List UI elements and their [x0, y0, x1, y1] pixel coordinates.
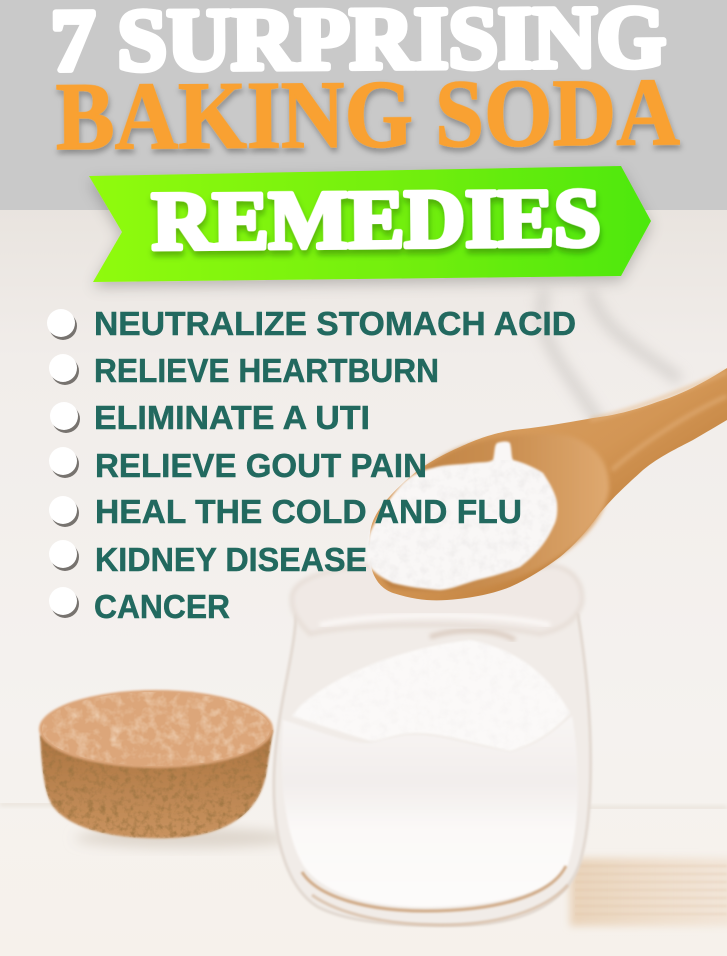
jar glass body: [274, 596, 591, 925]
cork shadow: [75, 828, 295, 848]
glass jar of baking soda: [274, 566, 591, 925]
list item 4: RELIEVE GOUT PAIN: [95, 447, 427, 484]
list item 6: KIDNEY DISEASE: [95, 541, 367, 578]
photo background: table surface: [0, 210, 727, 956]
spoon handle grain: [590, 372, 727, 470]
wooden spoon with baking soda: [367, 368, 727, 600]
list item 7: CANCER: [94, 588, 230, 625]
powder inside jar: [282, 716, 578, 907]
jar base rim: [302, 866, 566, 911]
powder rough upper surface: [292, 640, 570, 751]
list item 3: ELIMINATE A UTI: [94, 399, 370, 436]
list item 1: NEUTRALIZE STOMACH ACID: [94, 305, 576, 342]
cork stopper: [39, 690, 295, 848]
spoon bowl: [378, 434, 609, 591]
title line: BAKING SODA: BAKING SODA: [55, 58, 680, 170]
green arrow banner: [89, 166, 651, 282]
cork top: [39, 690, 273, 768]
list item 5: HEAL THE COLD AND FLU: [95, 493, 522, 530]
jar neck and rim: [292, 566, 582, 634]
banner ribbon: [89, 166, 651, 282]
table wood shadow at lower right: [555, 858, 727, 926]
spoon shape: [369, 368, 727, 600]
remedies list: [47, 305, 576, 625]
banner text: REMEDIES: REMEDIES: [151, 171, 601, 267]
grey header band: [0, 0, 727, 210]
cork side: [40, 730, 273, 838]
list item 2: RELIEVE HEARTBURN: [94, 352, 439, 389]
bullets: [47, 309, 80, 618]
powder heap in spoon: [367, 442, 557, 590]
